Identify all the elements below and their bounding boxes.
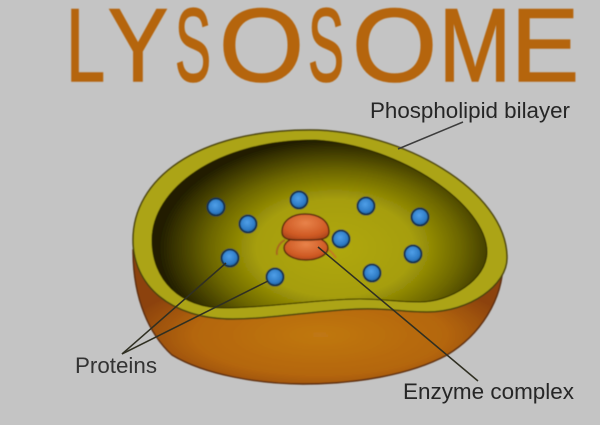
label: phospholipid bilayer: Phospholipid bilayer (370, 98, 570, 123)
leader line: enzyme complex (318, 247, 478, 381)
membrane rim (133, 130, 507, 319)
lysosome cell diagram (133, 130, 507, 384)
outer orange body (133, 250, 503, 384)
leader lines: proteins (122, 263, 268, 354)
title (66, 0, 579, 104)
enzyme complex (277, 214, 336, 260)
inner cavity (152, 140, 487, 308)
label: proteins: Proteins (75, 353, 157, 378)
label: enzyme complex: Enzyme complex (403, 379, 574, 404)
leader line: phospholipid bilayer (398, 122, 463, 149)
proteins (208, 192, 428, 286)
